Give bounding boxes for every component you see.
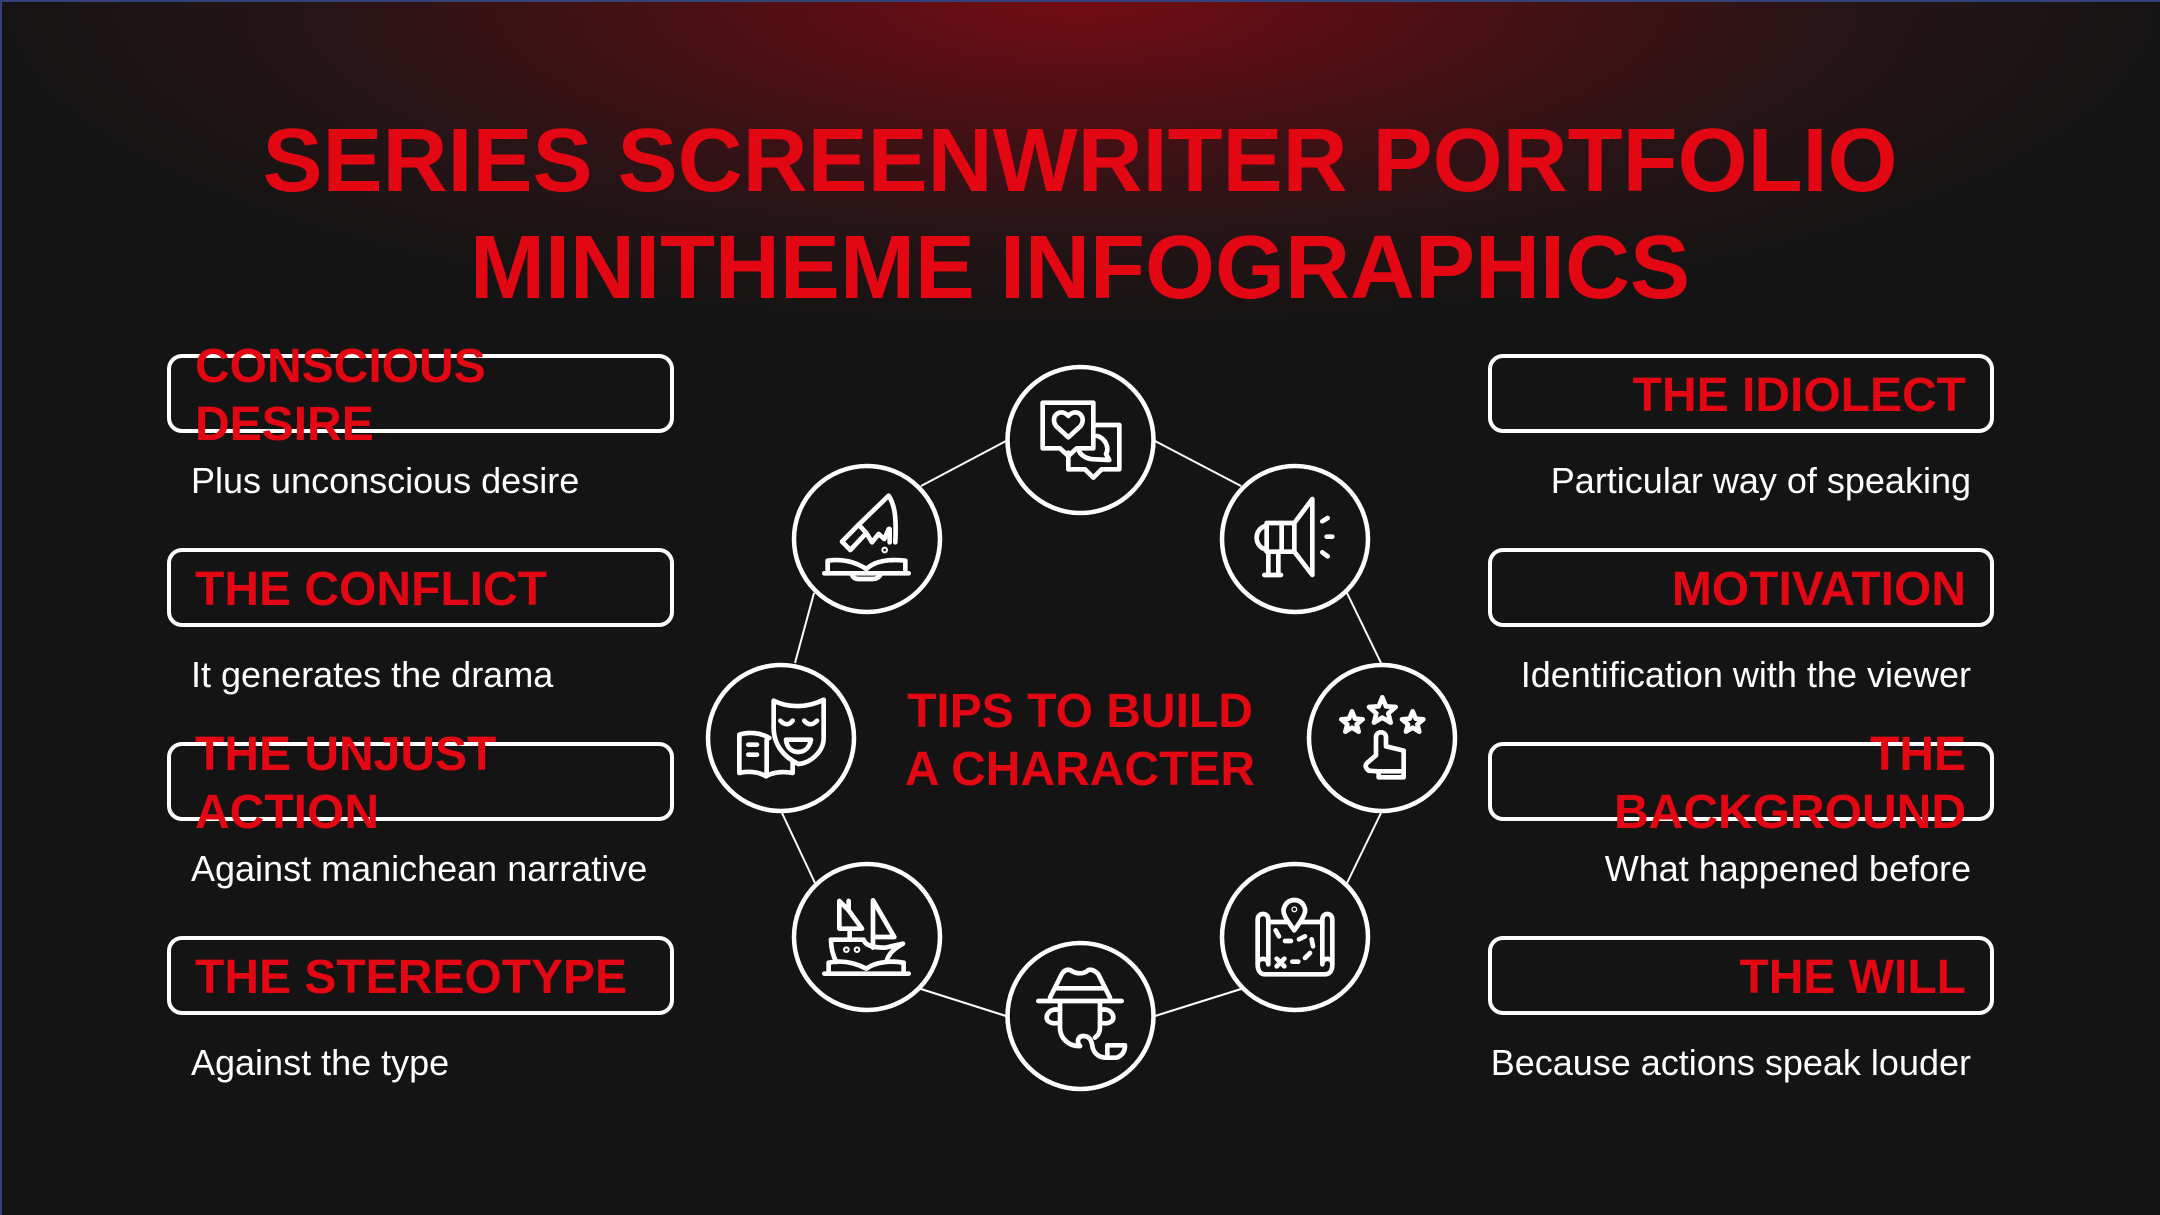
- panel: the background: [1490, 728, 1992, 889]
- panel: the unjust action: THE UNJUST: [195, 728, 496, 781]
- panel: motivation: [1490, 550, 1992, 695]
- icon: detective with pipe: [1008, 943, 1154, 1089]
- panel: conscious desire: CONSCIOUS: [195, 340, 486, 393]
- icon: ship on book: [794, 864, 940, 1010]
- title: MINITHEME INFOGRAPHICS: [470, 218, 1690, 318]
- panel: the idiolect: [1490, 356, 1992, 501]
- panel: the stereotype: [169, 938, 672, 1083]
- panel: the conflict: [169, 550, 672, 695]
- center label: TIPS TO BUILD: [907, 685, 1253, 738]
- panel: the conflict: It generates the drama: [191, 654, 554, 695]
- center label: A CHARACTER: [905, 743, 1255, 796]
- panel: the stereotype: Against the type: [191, 1042, 449, 1083]
- panel: the unjust action: Against manichean narrative: [191, 848, 647, 889]
- icon: megaphone: [1222, 466, 1368, 612]
- panel: the conflict: THE CONFLICT: [195, 563, 547, 616]
- center label: [905, 685, 1255, 796]
- panel: the background: What happened before: [1605, 848, 1971, 889]
- panel: motivation: Identification with the viewer: [1521, 654, 1971, 695]
- panel: the unjust action: [169, 728, 672, 889]
- panel: conscious desire: [169, 340, 672, 501]
- icon: stars and thumb: [1309, 665, 1455, 811]
- panel: the will: [1490, 938, 1992, 1083]
- panel: the will: THE WILL: [1739, 951, 1966, 1004]
- ring connectors: [782, 441, 1381, 1016]
- panel: conscious desire: Plus unconscious desire: [191, 460, 579, 501]
- panel: the background: BACKGROUND: [1614, 786, 1966, 839]
- panel: motivation: MOTIVATION: [1672, 563, 1966, 616]
- title: SERIES SCREENWRITER PORTFOLIO: [262, 111, 1898, 211]
- icon: chat bubbles with heart: [1008, 367, 1154, 513]
- icon: theatre mask and book: [708, 665, 854, 811]
- panel: the idiolect: THE IDIOLECT: [1633, 369, 1966, 422]
- panel: the background: THE: [1870, 728, 1966, 781]
- icon: treasure map: [1222, 864, 1368, 1010]
- panel: the stereotype: THE STEREOTYPE: [195, 951, 627, 1004]
- icon: bloody knife over book: [794, 466, 940, 612]
- panel: the idiolect: Particular way of speaking: [1551, 460, 1971, 501]
- title: [262, 111, 1898, 318]
- panel: the unjust action: ACTION: [195, 786, 379, 839]
- panel: the will: Because actions speak louder: [1491, 1042, 1971, 1083]
- panel: conscious desire: DESIRE: [195, 398, 374, 451]
